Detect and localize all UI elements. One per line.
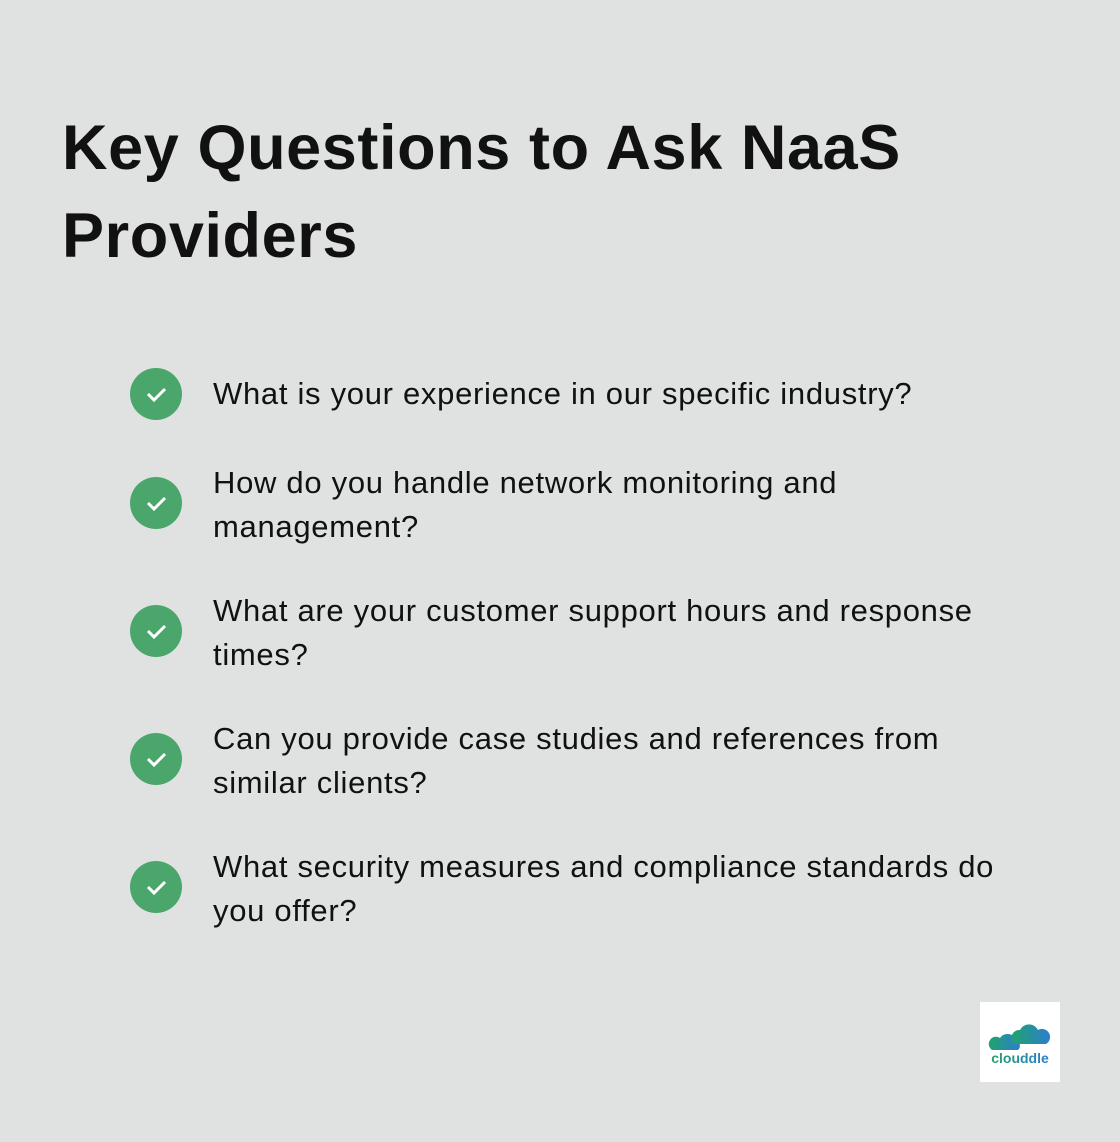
title: Providers — [62, 201, 358, 271]
text — [213, 849, 994, 928]
text: you offer? — [213, 893, 357, 928]
text: Can you provide case studies and references from — [213, 721, 939, 756]
text: times? — [213, 637, 309, 672]
title — [62, 113, 901, 271]
icon: check — [130, 861, 182, 913]
icon: check — [130, 733, 182, 785]
logo — [980, 1002, 1060, 1082]
item 4 — [130, 721, 939, 800]
text: What are your customer support hours and response — [213, 593, 973, 628]
text: What security measures and compliance standards do — [213, 849, 994, 884]
item 2 — [130, 465, 837, 544]
text: What is your experience in our specific industry? — [213, 376, 912, 411]
text — [213, 721, 939, 800]
item 5 — [130, 849, 994, 928]
text: similar clients? — [213, 765, 427, 800]
icon: check — [130, 605, 182, 657]
item 1 — [130, 368, 912, 420]
text — [213, 593, 973, 672]
icon: check — [130, 477, 182, 529]
title: Key Questions to Ask NaaS — [62, 113, 901, 183]
text: management? — [213, 509, 419, 544]
item 3 — [130, 593, 973, 672]
icon: check — [130, 368, 182, 420]
text: How do you handle network monitoring and — [213, 465, 837, 500]
logo: clouddle — [991, 1050, 1049, 1066]
text — [213, 465, 837, 544]
